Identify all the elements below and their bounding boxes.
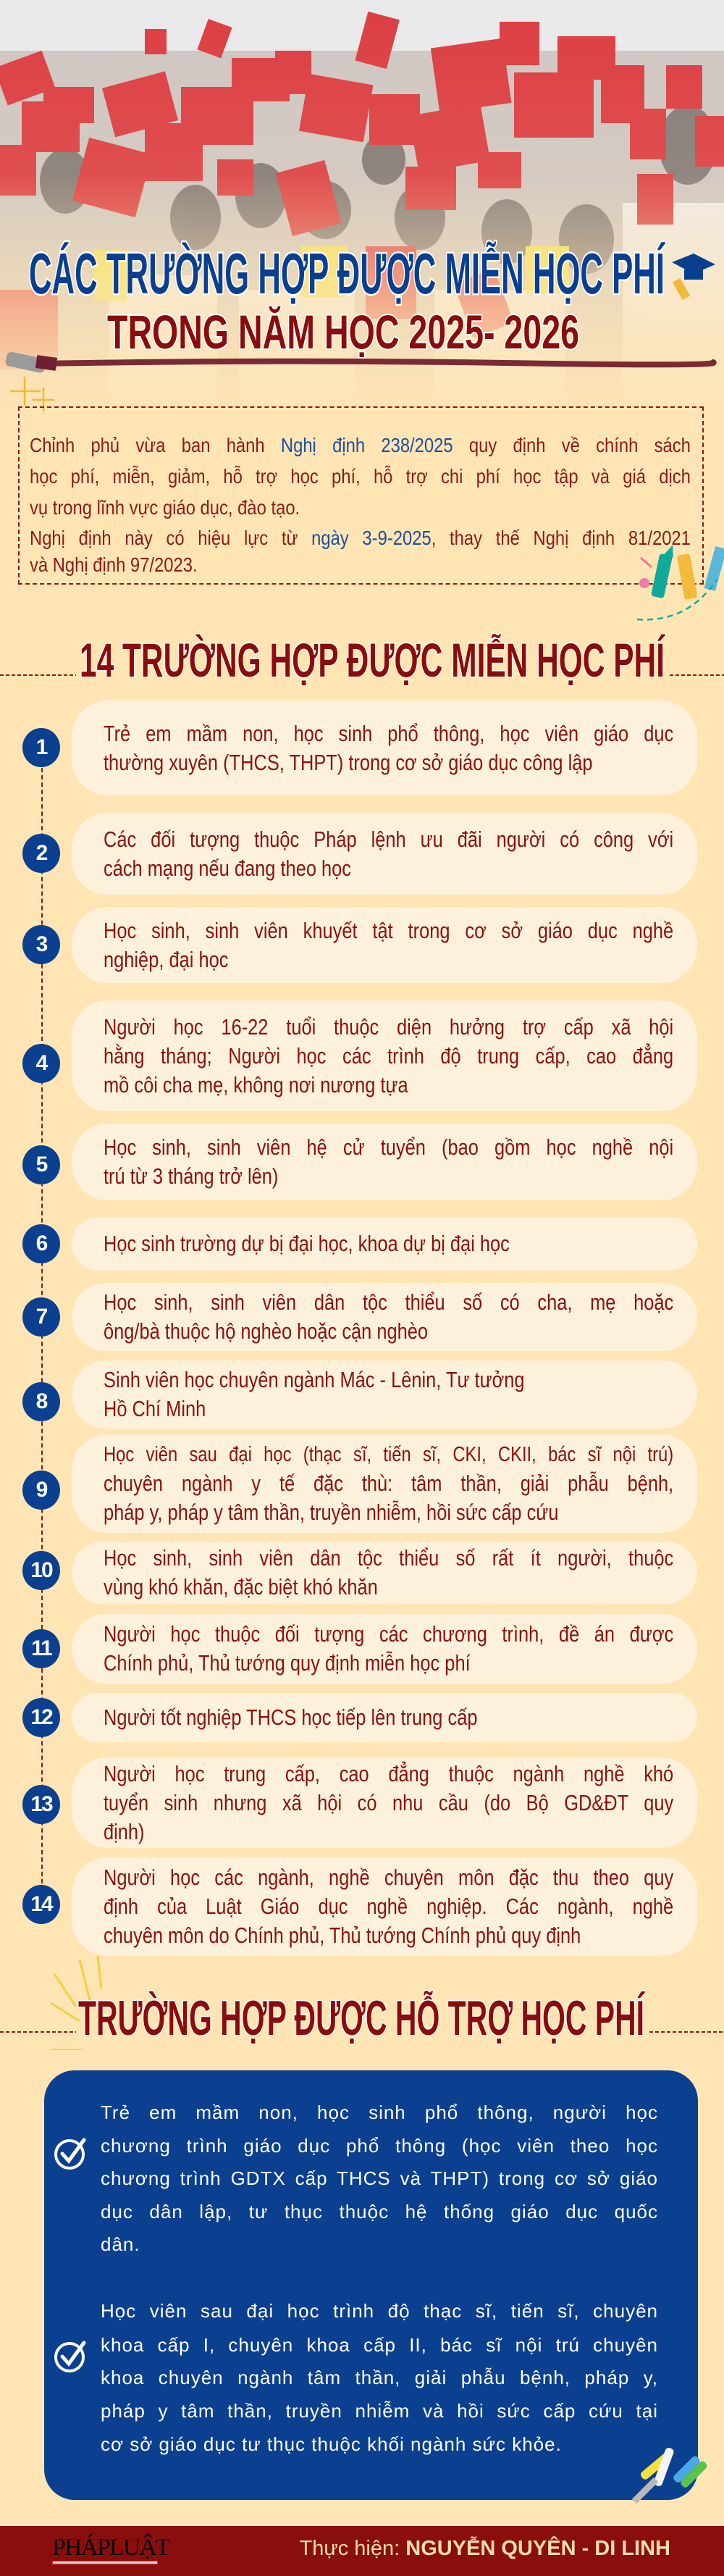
icon: graduation cap bbox=[672, 254, 715, 300]
number 6: 6 bbox=[36, 1231, 46, 1255]
item 1: thường xuyên (THCS, THPT) trong cơ sở giáo dục công lập bbox=[104, 749, 593, 775]
credit: Thực hiện: NGUYỄN QUYÊN - DI LINH bbox=[299, 2537, 670, 2560]
item 4 bbox=[72, 1000, 697, 1111]
item 7: ông/bà thuộc hộ nghèo hoặc cận nghèo bbox=[104, 1318, 428, 1344]
item 2 bbox=[72, 813, 697, 895]
number 3: 3 bbox=[36, 932, 46, 956]
item 11: Người học thuộc đối tượng các chương trình, đề án được bbox=[104, 1621, 673, 1647]
footer bbox=[0, 2526, 724, 2576]
number 10 bbox=[22, 1551, 60, 1590]
item 4: mồ côi cha mẹ, không nơi nương tựa bbox=[104, 1072, 408, 1097]
item 14: chuyên môn do Chính phủ, Thủ tướng Chính phủ quy định bbox=[104, 1923, 581, 1948]
item 13: tuyển sinh nhưng xã hội có nhu cầu (do Bộ GD&ĐT quy bbox=[104, 1789, 673, 1815]
intro text box: và Nghị định 97/2023. bbox=[30, 553, 198, 576]
timeline dashed line bbox=[41, 746, 43, 1905]
icon: pencils decoration bbox=[637, 545, 724, 621]
item 9: chuyên ngành y tế đặc thù: tâm thần, giải phẫu bệnh, bbox=[104, 1471, 673, 1496]
number 11 bbox=[22, 1629, 60, 1668]
panel: support cases: dục dân lập, tư thục thuộc hệ thống giáo dục quốc bbox=[101, 2201, 658, 2222]
intro text box: Nghị định này có hiệu lực từ ngày 3-9-2025, thay thế Nghị định 81/2021 bbox=[30, 527, 691, 549]
item 2: cách mạng nếu đang theo học bbox=[104, 855, 351, 881]
panel: support cases: khoa cấp I, chuyên khoa cấp II, bác sĩ nội trú chuyên bbox=[101, 2334, 658, 2356]
number 2: 2 bbox=[36, 841, 46, 865]
item 9: Học viên sau đại học (thạc sĩ, tiến sĩ, CKI, CKII, bác sĩ nội trú) bbox=[104, 1443, 673, 1466]
item 6: Học sinh trường dự bị đại học, khoa dự bị đại học bbox=[104, 1231, 510, 1256]
sparkles bbox=[10, 377, 54, 411]
brush stroke bbox=[5, 351, 714, 374]
panel: support cases: Học viên sau đại học trình độ thạc sĩ, tiến sĩ, chuyên bbox=[101, 2300, 658, 2322]
item 10: Học sinh, sinh viên dân tộc thiểu số rất ít người, thuộc bbox=[104, 1545, 673, 1571]
item 3: nghiệp, đại học bbox=[104, 946, 228, 972]
number 13: 13 bbox=[30, 1792, 52, 1816]
number 5 bbox=[22, 1145, 60, 1184]
item 5 bbox=[72, 1124, 697, 1200]
title bbox=[6, 239, 717, 411]
item 2: Các đối tượng thuộc Pháp lệnh ưu đãi người có công với bbox=[104, 826, 673, 852]
number 5: 5 bbox=[36, 1153, 46, 1176]
item 13: định) bbox=[104, 1818, 145, 1844]
item 8: Sinh viên học chuyên ngành Mác - Lênin, Tư tưởng bbox=[104, 1367, 525, 1392]
panel: support cases: dân. bbox=[101, 2233, 140, 2255]
panel: support cases: cơ sở giáo dục tư thục thuộc khối ngành sức khỏe. bbox=[101, 2433, 562, 2455]
hero photo bbox=[0, 0, 724, 369]
panel: support cases: chương trình GDTX cấp THCS và THPT) trong cơ sở giáo bbox=[101, 2167, 658, 2189]
item 5: trú từ 3 tháng trở lên) bbox=[104, 1163, 278, 1189]
number 9: 9 bbox=[36, 1478, 46, 1502]
item 9: pháp y, pháp y tâm thần, truyền nhiễm, hồi sức cấp cứu bbox=[104, 1500, 558, 1525]
item 12 bbox=[72, 1693, 697, 1742]
number 6 bbox=[22, 1224, 60, 1263]
heading: support cases bbox=[0, 1956, 723, 2050]
icon: check 2 bbox=[54, 2341, 85, 2372]
number 11: 11 bbox=[31, 1636, 51, 1660]
panel: support cases: pháp y tâm thần, truyền nhiễm và hồi sức cấp cứu tại bbox=[101, 2400, 658, 2422]
number 7: 7 bbox=[36, 1305, 46, 1329]
item 8 bbox=[72, 1360, 697, 1429]
item 12: Người tốt nghiệp THCS học tiếp lên trung cấp bbox=[104, 1705, 477, 1730]
number 1: 1 bbox=[36, 735, 46, 759]
item 5: Học sinh, sinh viên hệ cử tuyển (bao gồm học nghề nội bbox=[104, 1134, 673, 1160]
item 10 bbox=[72, 1542, 697, 1604]
number 8: 8 bbox=[36, 1389, 46, 1413]
item 6 bbox=[72, 1217, 697, 1271]
panel: support cases: chương trình giáo dục phổ thông (học viên theo học bbox=[101, 2135, 658, 2157]
number 1 bbox=[22, 728, 60, 767]
list: 14 cases bbox=[22, 701, 697, 1956]
panel: support cases: khoa chuyên ngành tâm thần, giải phẫu bệnh, pháp y, bbox=[101, 2367, 658, 2388]
item 3: Học sinh, sinh viên khuyết tật trong cơ sở giáo dục nghề bbox=[104, 917, 673, 943]
icon: chalk bbox=[631, 2448, 707, 2504]
number 2 bbox=[22, 834, 60, 873]
intro text box: Chỉnh phủ vừa ban hành Nghị định 238/2025 quy định về chính sách bbox=[30, 434, 691, 456]
panel: support cases: Trẻ em mầm non, học sinh phổ thông, người học bbox=[101, 2102, 658, 2123]
number 14: 14 bbox=[30, 1892, 52, 1916]
number 4: 4 bbox=[36, 1051, 46, 1075]
number 13 bbox=[22, 1785, 60, 1824]
item 14: Người học các ngành, nghề chuyên môn đặc thu theo quy bbox=[104, 1865, 673, 1890]
item 13: Người học trung cấp, cao đẳng thuộc ngành nghề khó bbox=[104, 1760, 673, 1786]
number 12 bbox=[22, 1698, 60, 1737]
item 1: Trẻ em mầm non, học sinh phổ thông, học viên giáo dục bbox=[104, 720, 673, 746]
item 10: vùng khó khăn, đặc biệt khó khăn bbox=[104, 1574, 378, 1599]
item 14 bbox=[72, 1857, 697, 1956]
icon: check 1 bbox=[54, 2138, 85, 2170]
number 10: 10 bbox=[30, 1558, 52, 1582]
item 11 bbox=[72, 1614, 697, 1684]
item 7 bbox=[72, 1283, 697, 1351]
item 11: Chính phủ, Thủ tướng quy định miễn học phí bbox=[104, 1650, 471, 1676]
number 12: 12 bbox=[30, 1705, 52, 1729]
item 7: Học sinh, sinh viên dân tộc thiểu số có cha, mẹ hoặc bbox=[104, 1289, 673, 1315]
number 4 bbox=[22, 1044, 60, 1083]
logo: PHÁPLUẬT bbox=[52, 2534, 169, 2561]
intro text box: vụ trong lĩnh vực giáo dục, đào tạo. bbox=[30, 496, 300, 519]
item 14: định của Luật Giáo dục nghề nghiệp. Các ngành, nghề bbox=[104, 1894, 673, 1919]
number 9 bbox=[22, 1471, 60, 1510]
item 13 bbox=[72, 1757, 697, 1848]
item 9 bbox=[72, 1434, 697, 1533]
number 7 bbox=[22, 1297, 60, 1337]
panel: support cases bbox=[44, 2070, 698, 2500]
item 3 bbox=[72, 907, 697, 983]
intro text box: học phí, miễn, giảm, hỗ trợ học phí, hỗ trợ chi phí học tập và giá dịch bbox=[30, 465, 691, 488]
item 8: Hồ Chí Minh bbox=[104, 1396, 206, 1421]
intro text box bbox=[18, 406, 704, 585]
number 3 bbox=[22, 925, 60, 964]
item 1 bbox=[72, 701, 697, 795]
number 14 bbox=[22, 1885, 60, 1924]
item 4: Người học 16-22 tuổi thuộc diện hưởng trợ cấp xã hội bbox=[104, 1014, 673, 1039]
item 4: hằng tháng; Người học các trình độ trung cấp, cao đẳng bbox=[104, 1043, 673, 1068]
number 8 bbox=[22, 1382, 60, 1421]
